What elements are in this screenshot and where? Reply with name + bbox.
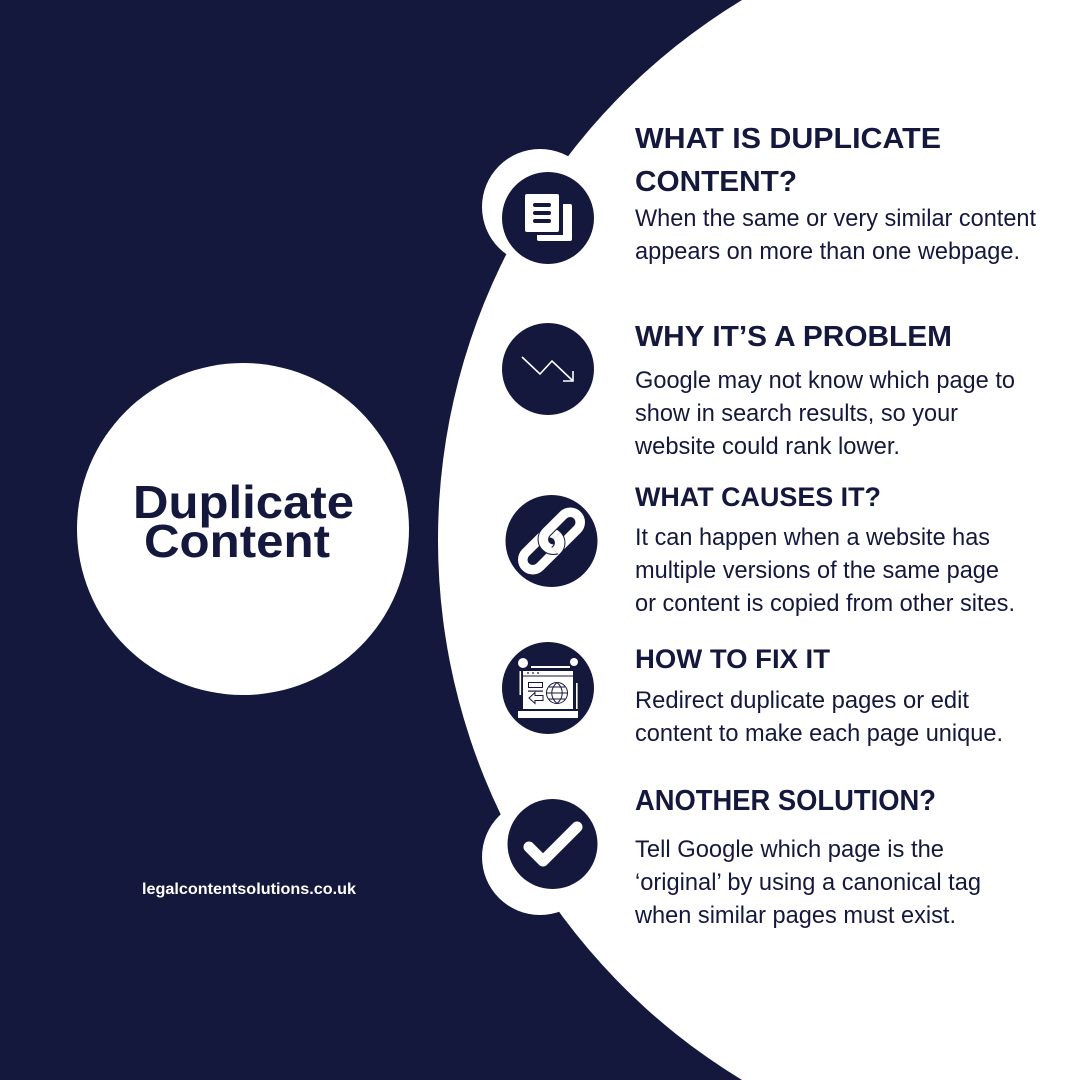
section: another solution: ANOTHER SOLUTION? [635, 785, 936, 817]
section: what causes it: WHAT CAUSES IT? [635, 482, 881, 512]
icon: web page with globe [502, 642, 594, 734]
section: another solution [634, 785, 981, 929]
section: what is duplicate content: WHAT IS DUPLICATE [635, 123, 941, 155]
section: another solution: when similar pages must exist. [634, 902, 956, 929]
section: another solution: ‘original’ by using a canonical tag [635, 869, 981, 896]
section: how to fix it: HOW TO FIX IT [635, 644, 830, 674]
icon: downward trend arrow [502, 323, 594, 415]
white arc panel [438, 0, 1080, 1080]
bottom notch circle [482, 799, 598, 915]
section: why it's a problem [634, 321, 1015, 460]
section: what is duplicate content [635, 123, 1036, 265]
section: how to fix it [635, 644, 1003, 747]
section: what is duplicate content: CONTENT? [635, 166, 797, 198]
icon: documents [502, 172, 594, 264]
section: why it's a problem: Google may not know which page to [635, 367, 1015, 394]
section: what is duplicate content: When the same or very similar content [635, 205, 1036, 232]
icon: chain link [506, 495, 598, 587]
section: how to fix it: content to make each page unique. [635, 720, 1003, 747]
title [133, 476, 354, 567]
section: what causes it: or content is copied from other sites. [635, 590, 1015, 617]
title: Duplicate [133, 476, 354, 528]
section: why it's a problem: website could rank lower. [634, 433, 900, 460]
title circle [77, 363, 409, 695]
section: what causes it [635, 482, 1015, 617]
section: why it's a problem: show in search results, so your [635, 400, 958, 427]
website url: legalcontentsolutions.co.uk [142, 881, 356, 898]
section: another solution: Tell Google which page is the [635, 836, 944, 863]
section: what causes it: It can happen when a website has [635, 524, 990, 551]
icon: check mark [508, 799, 598, 889]
top notch circle [482, 149, 598, 265]
title: Content [144, 515, 330, 567]
section: what causes it: multiple versions of the same page [635, 557, 999, 584]
section: how to fix it: Redirect duplicate pages or edit [635, 687, 969, 714]
section: why it's a problem: WHY IT’S A PROBLEM [635, 321, 952, 353]
section: what is duplicate content: appears on more than one webpage. [635, 238, 1020, 265]
